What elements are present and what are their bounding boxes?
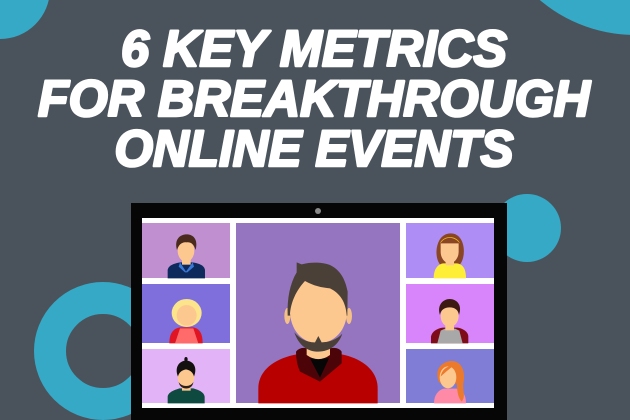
participant: blonde woman in red top [169, 299, 203, 343]
decorative ring: bottom left [50, 298, 156, 404]
laptop screen [142, 218, 494, 408]
title [38, 20, 591, 177]
decorative circle: behind laptop [493, 194, 561, 262]
video tile: bottom right [406, 349, 494, 403]
video tile: main speaker [236, 223, 400, 403]
video tile: top right [406, 223, 494, 278]
participant: red-haired woman in pink top [434, 361, 466, 403]
title: 6 KEY METRICS [121, 20, 507, 77]
participant: man in gray shirt and maroon jacket [431, 299, 468, 343]
video tile: bottom left [142, 349, 230, 403]
laptop frame [131, 203, 507, 420]
title: FOR BREAKTHROUGH [38, 70, 591, 127]
participant: woman with headband in yellow top [434, 233, 466, 278]
video tile: top left [142, 223, 230, 278]
video tile: middle right [406, 284, 494, 343]
webcam [315, 208, 321, 214]
participant: man in navy shirt [168, 234, 205, 278]
decorative circle: top left [0, 0, 50, 39]
decorative circle: top right [488, 0, 630, 35]
main speaker: bearded man in red sweater [258, 262, 378, 403]
participant: man with top knot in green sweater [168, 357, 205, 403]
title: ONLINE EVENTS [114, 120, 514, 177]
video tile: middle left [142, 284, 230, 343]
